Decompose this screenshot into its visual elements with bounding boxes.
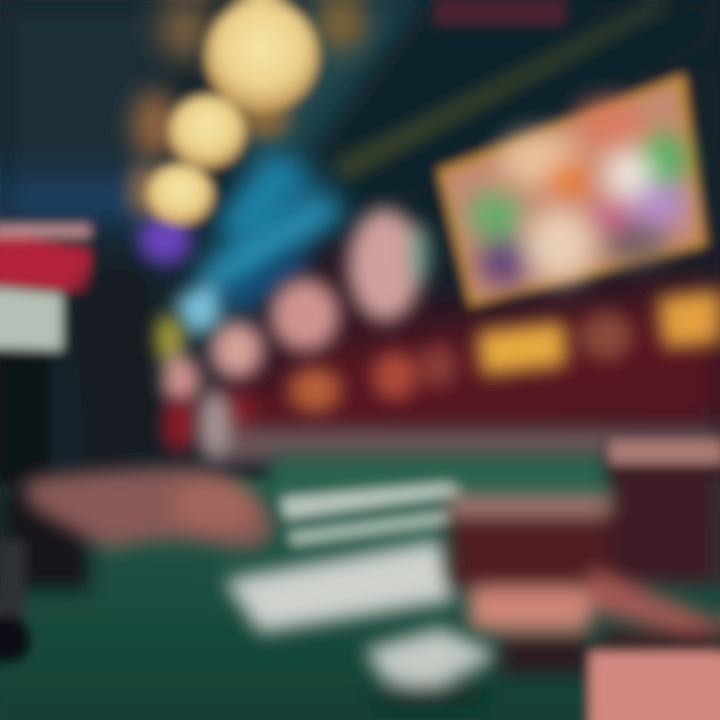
stacked cards stripes: [280, 482, 465, 546]
slot machine bank: [147, 209, 720, 451]
green table felt: [0, 456, 720, 720]
left dark foreground object: [0, 355, 90, 664]
dark standing figure: [76, 268, 158, 472]
hand reaching over table: [25, 468, 272, 548]
hanging globe lights: [129, 0, 360, 225]
glass or post: [199, 389, 231, 461]
white playing cards: [225, 540, 500, 705]
ceiling blue light streaks: [139, 150, 345, 335]
poker chip stacks: [445, 440, 720, 720]
large casino screen: [438, 74, 706, 306]
gray rail behind table: [220, 428, 720, 462]
red and white banner: [0, 225, 90, 350]
